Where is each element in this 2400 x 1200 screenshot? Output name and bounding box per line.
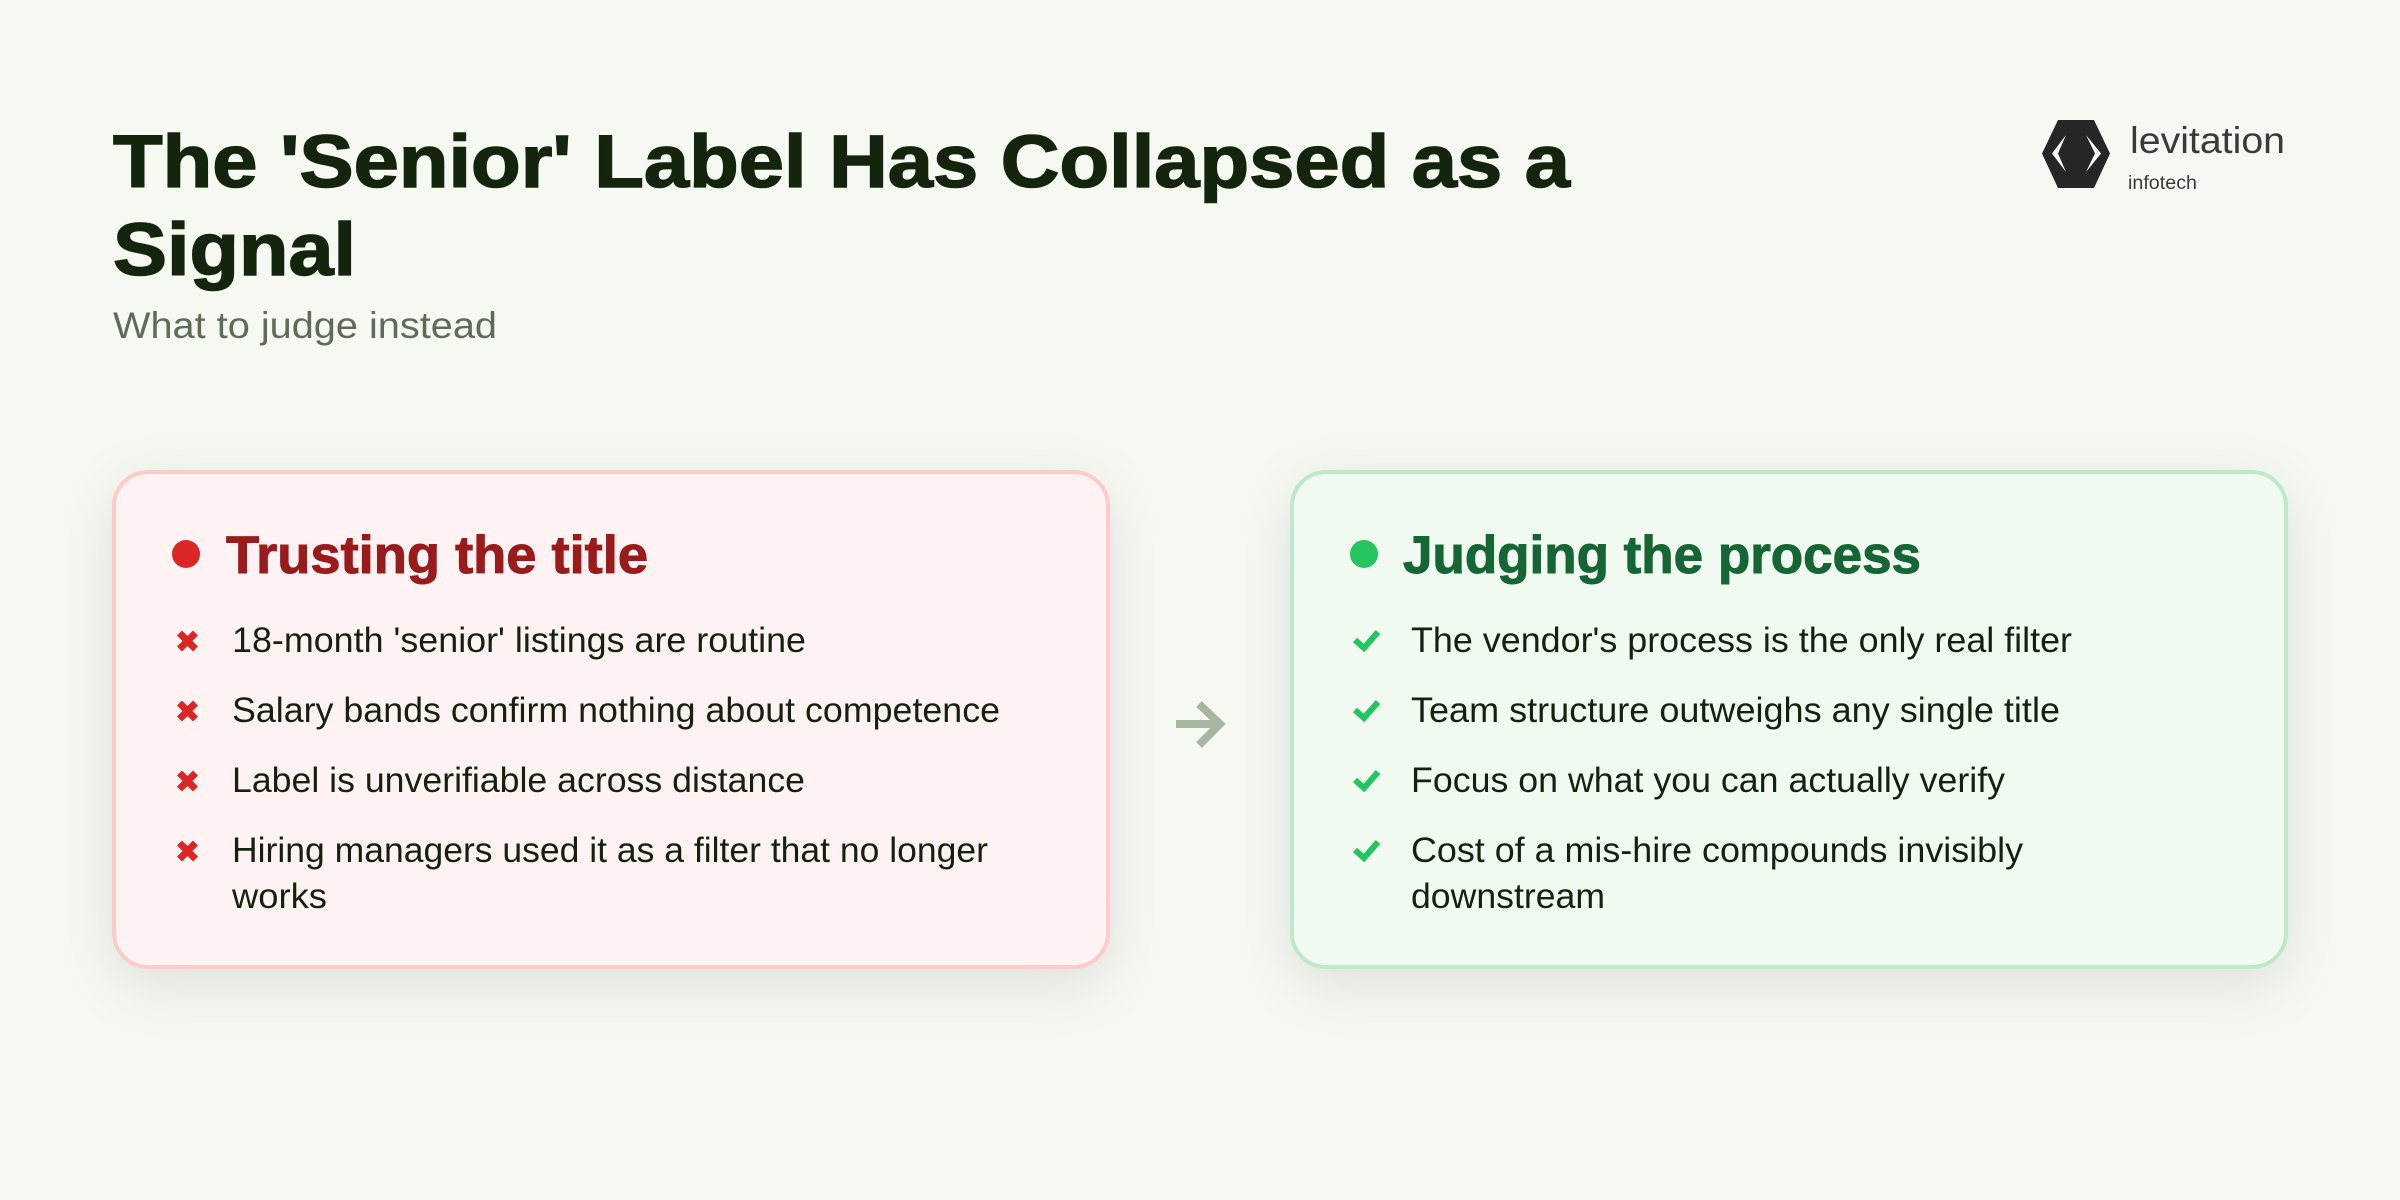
item: cost of mis-hire: Cost of a mis-hire compounds invisibly bbox=[1411, 831, 2024, 870]
icon: hexagon with chevrons bbox=[2042, 120, 2110, 188]
title: Signal bbox=[113, 208, 356, 291]
arrow bbox=[1176, 701, 1226, 748]
subtitle: What to judge instead bbox=[113, 305, 497, 346]
item: label unverifiable: Label is unverifiable across distance bbox=[232, 761, 805, 800]
title bbox=[113, 120, 1572, 292]
panel: trusting the title bbox=[112, 470, 1110, 969]
panel heading: trusting the title: Trusting the title bbox=[226, 526, 648, 585]
logo wordmark bbox=[2128, 120, 2285, 194]
item: hiring managers: works bbox=[231, 877, 327, 916]
panel heading: judging the process: Judging the process bbox=[1403, 526, 1921, 585]
item: team structure: Team structure outweighs any single title bbox=[1411, 691, 2060, 730]
item: salary bands: Salary bands confirm nothing about competence bbox=[232, 691, 1000, 730]
item: hiring managers bbox=[180, 831, 988, 916]
title: The 'Senior' Label Has Collapsed as a bbox=[113, 120, 1571, 203]
item: vendor process: The vendor's process is the only real filter bbox=[1411, 621, 2072, 660]
item: cost of mis-hire bbox=[1355, 831, 2024, 916]
item: hiring managers: Hiring managers used it as a filter that no longer bbox=[232, 831, 988, 870]
logo wordmark: levitation bbox=[2130, 120, 2285, 161]
item: 18-month listings: 18-month 'senior' listings are routine bbox=[232, 621, 806, 660]
item: focus verify: Focus on what you can actually verify bbox=[1411, 761, 2006, 800]
panel: judging the process bbox=[1290, 470, 2288, 969]
item: cost of mis-hire: downstream bbox=[1411, 877, 1605, 916]
logo wordmark: infotech bbox=[2128, 173, 2197, 194]
logo: levitation infotech bbox=[2042, 120, 2285, 194]
